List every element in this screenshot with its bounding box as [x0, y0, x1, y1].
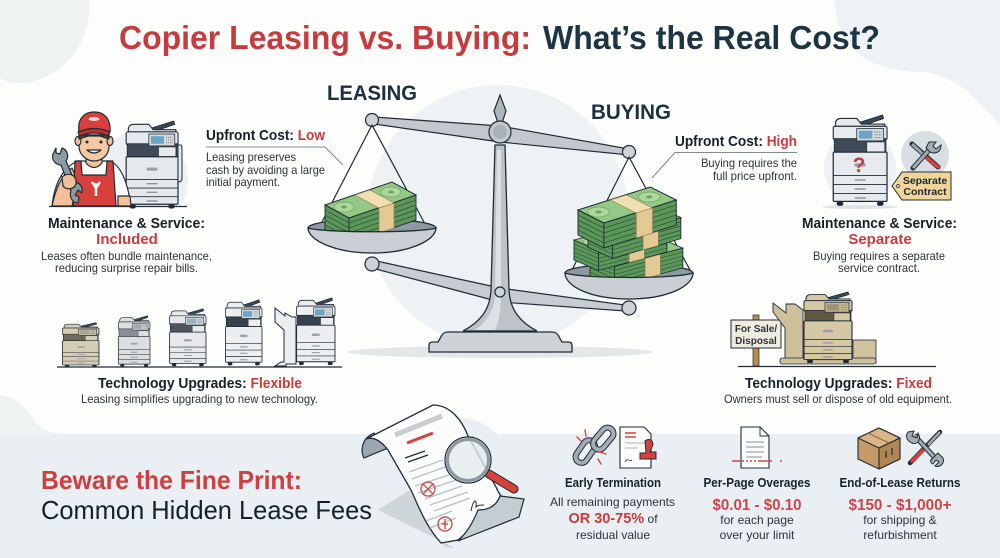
panel: buying old copier [731, 292, 936, 366]
icon: contract with stamp [620, 427, 656, 468]
shirt torso [52, 161, 131, 206]
ground shadow [348, 346, 652, 358]
heading: fine print: Beware the Fine Print: [41, 465, 302, 495]
title part 1: Copier Leasing vs. Buying: [119, 19, 531, 56]
price: $150 - $1,000+ [848, 497, 952, 514]
heading: Upfront Cost: High [675, 133, 797, 150]
body: for each page [720, 513, 794, 527]
icon: copier [833, 115, 887, 206]
right pan chains [572, 157, 690, 270]
panel: leasing technology [81, 375, 318, 406]
ground line [57, 366, 342, 368]
body text: full price upfront. [713, 169, 797, 183]
limit dashed line [732, 460, 782, 462]
icon: beige copier [63, 323, 99, 367]
magnifier [445, 437, 514, 489]
panel: early termination [550, 425, 675, 542]
arm left skin [52, 168, 78, 206]
sign: for sale [731, 320, 781, 348]
icon: cardboard box [858, 428, 900, 469]
subheading: hidden lease fees: Common Hidden Lease Fees [41, 495, 372, 525]
body: All remaining payments [550, 495, 675, 509]
icon: beige copier [804, 292, 852, 363]
lower pivot [495, 287, 505, 297]
body: refurbishment [863, 528, 937, 542]
leasing label: LEASING [327, 82, 417, 105]
panel: leasing maintenance [49, 112, 188, 209]
overalls [73, 161, 116, 206]
body text: leasing maintenance: Leases often bundle maintenance, [41, 249, 212, 263]
upper beam [374, 117, 629, 155]
top-right background blob [835, 0, 1000, 125]
side cabinet [853, 340, 876, 363]
page sheet [366, 405, 506, 543]
panel: leasing upfront cost [206, 127, 343, 189]
right pan rim [565, 264, 693, 282]
sign: for sale: For Sale/ [735, 324, 777, 335]
body: for shipping & [863, 513, 937, 527]
body text: cash by avoiding a large [206, 163, 325, 177]
body text: buying maintenance: service contract. [838, 261, 920, 275]
body text: leasing maintenance [41, 249, 212, 275]
overall wrench emblem [92, 182, 100, 196]
smile [87, 150, 101, 153]
right pan bowl [565, 273, 693, 299]
leader line [652, 152, 797, 178]
arm right skin [118, 196, 131, 206]
buying label: BUYING [591, 101, 671, 124]
bump behind document [395, 417, 515, 533]
title part 2: What’s the Real Cost? [543, 19, 880, 56]
balance scale [308, 85, 693, 358]
neck [86, 155, 102, 168]
body text: Leasing preserves [206, 150, 296, 164]
pole highlight [475, 150, 501, 330]
panel: buying upfront cost [652, 133, 797, 183]
finisher [773, 303, 803, 360]
sign: for sale: Disposal [735, 336, 777, 347]
tag: separate contract: Contract [903, 186, 947, 198]
heading bars [395, 416, 442, 435]
icon: crossed tools [907, 431, 943, 466]
leader line [206, 147, 343, 165]
tag: separate contract: Separate [903, 175, 947, 187]
icon: page [741, 427, 769, 468]
center pivot [489, 121, 511, 143]
heading: buying maintenance: Maintenance & Service: [802, 215, 957, 232]
wrench [53, 148, 82, 203]
top curl [362, 433, 388, 458]
ground line [738, 366, 936, 368]
left money stack [325, 182, 416, 243]
copier side tray [178, 145, 182, 182]
icon: finisher [275, 308, 296, 366]
body text [701, 156, 797, 183]
body text: leasing maintenance: reducing surprise repair bills. [55, 261, 198, 275]
panel: buying maintenance [822, 115, 951, 209]
scale lower beam [372, 260, 625, 311]
left pan rim [308, 219, 436, 237]
title [119, 19, 880, 56]
bottom fees band background [0, 434, 1000, 558]
icon: copier with finisher [297, 298, 335, 365]
red seal [421, 482, 435, 496]
body text: initial payment. [206, 175, 280, 189]
backdrop circle [367, 85, 629, 347]
body text: Leasing simplifies upgrading to new technology. [81, 392, 318, 406]
top-left background blob [0, 0, 89, 83]
body text: buying maintenance: Buying requires a separate [813, 249, 945, 263]
body text: Buying requires the [701, 156, 797, 170]
icon: modern copier [226, 300, 262, 365]
body: over your limit [720, 528, 795, 542]
scale base [429, 332, 572, 352]
heading: Technology Upgrades: Fixed [745, 375, 932, 392]
label: Early Termination [565, 476, 661, 490]
red stamp [438, 517, 452, 531]
body text: buying maintenance [813, 249, 945, 275]
heading: Technology Upgrades: Flexible [98, 375, 302, 392]
heading: Upfront Cost: Low [206, 127, 325, 144]
body text [206, 150, 325, 189]
value: included: Included [96, 231, 158, 248]
panel: end-of-lease returns [840, 428, 961, 542]
eyes [86, 140, 88, 144]
scale pole [463, 145, 537, 331]
text lines [409, 460, 470, 528]
cap [79, 112, 110, 132]
illustration backdrop [92, 131, 188, 206]
question mark: ? [853, 154, 865, 177]
body: residual value [576, 528, 650, 542]
label: End-of-Lease Returns [840, 476, 961, 490]
sign post [753, 315, 759, 366]
tag: separate contract [892, 172, 951, 200]
left pan chains [322, 125, 425, 224]
right money stacks [574, 187, 683, 286]
value: separate: Separate [848, 231, 912, 248]
ground line [49, 206, 187, 208]
icon: crossed tools [901, 131, 949, 179]
beam end knobs [365, 114, 636, 315]
hair [79, 135, 109, 139]
finisher base [780, 358, 876, 364]
body [550, 495, 675, 542]
icon: mechanic [52, 112, 131, 206]
face [79, 135, 109, 161]
icon: grey copier [118, 316, 150, 367]
body text: Owners must sell or dispose of old equipment. [724, 392, 952, 406]
icon: copier [126, 121, 178, 209]
illustration: contract with magnifier [362, 405, 524, 548]
icon: broken chain [573, 425, 616, 465]
drop shadow [378, 490, 455, 548]
finial [494, 95, 506, 125]
body: OR 30-75% of [568, 511, 658, 527]
bottom roll [458, 496, 524, 541]
price: $0.01 - $0.10 [712, 497, 802, 514]
panel: leasing copier evolution row [57, 298, 342, 367]
label: Per-Page Overages [704, 476, 811, 490]
panel: buying technology [724, 375, 952, 406]
signature [471, 501, 484, 511]
copier backdrop [824, 132, 896, 204]
hand [62, 174, 76, 189]
floor shadow [822, 205, 898, 209]
heading: leasing maintenance: Maintenance & Service: [48, 215, 205, 232]
left pan bowl [308, 228, 436, 253]
icon: light copier [170, 309, 206, 366]
bottom-left background wash [0, 395, 70, 434]
panel: per-page overages [704, 427, 811, 542]
